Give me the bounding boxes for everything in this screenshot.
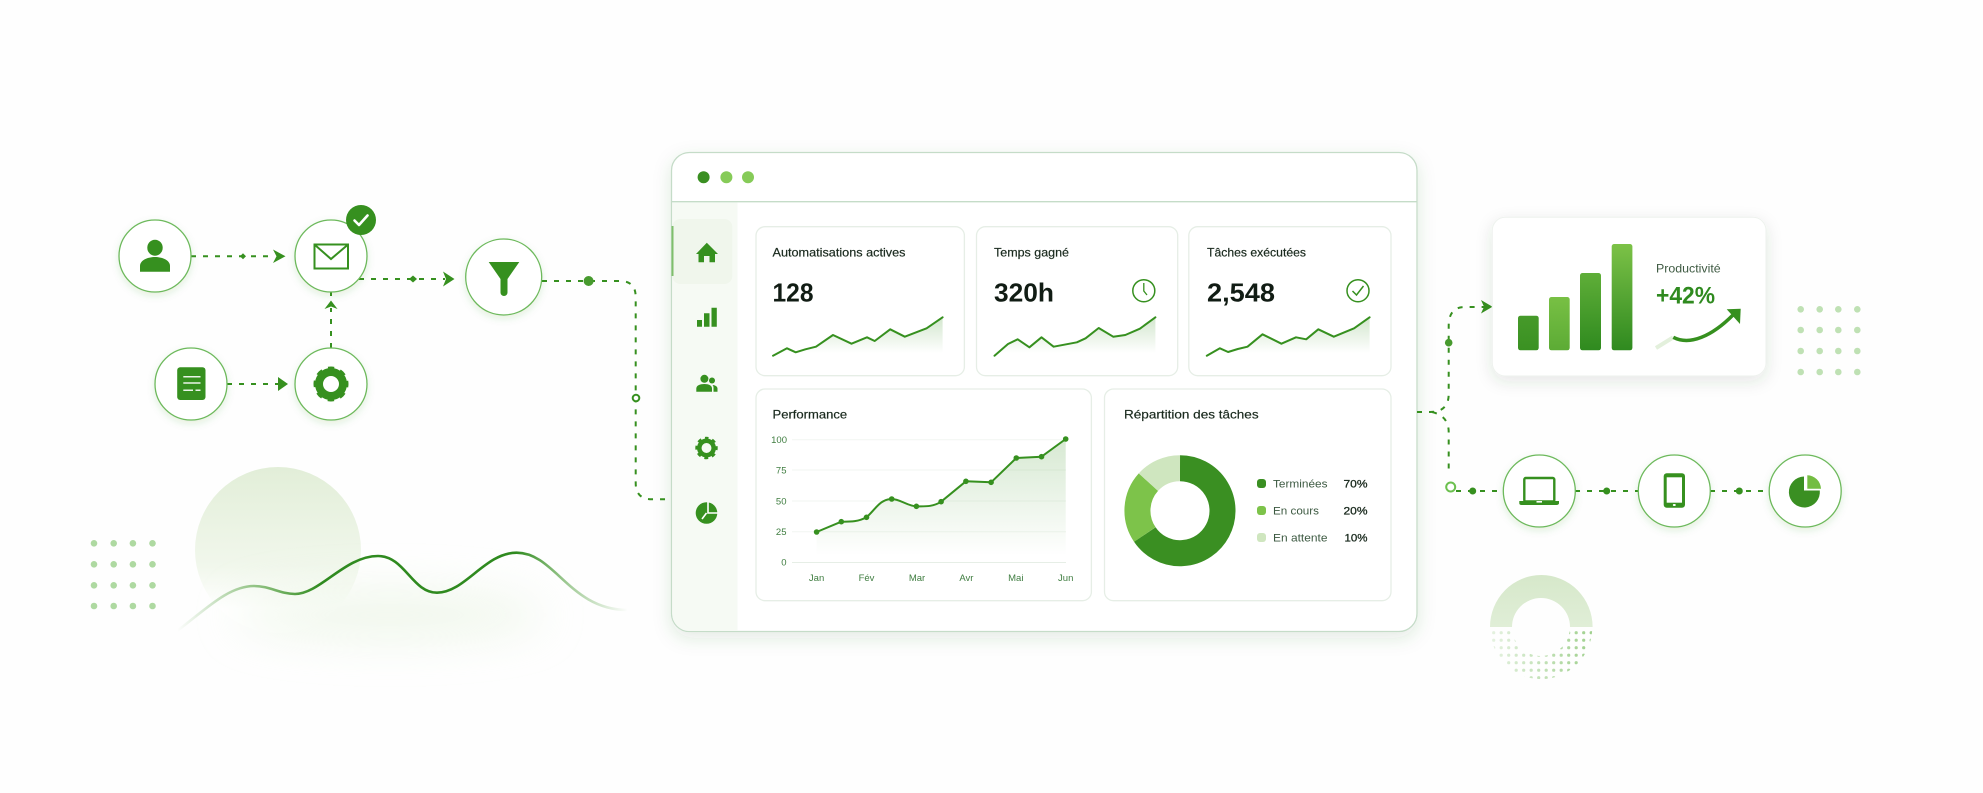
y axis labels: 100: [771, 435, 787, 446]
node: person: [119, 220, 191, 292]
window controls: [698, 171, 754, 183]
card: répartition des tâches: [1104, 389, 1391, 601]
flow connector: dashboard to devices: [1432, 412, 1769, 494]
card: automatisations actives: 128: [772, 278, 814, 308]
decoration: right dot grid: [1797, 306, 1861, 375]
area and line: [817, 439, 1066, 562]
icon: home: [696, 243, 718, 262]
donut chart: [1137, 468, 1223, 553]
window header line: [672, 201, 1417, 203]
y axis labels: 25: [776, 527, 786, 538]
card: tâches exécutées: Tâches exécutées: [1207, 246, 1306, 260]
decoration: left dot grid: [91, 540, 156, 609]
x axis labels: Avr: [959, 573, 973, 584]
flow connector: mail to filter: [359, 272, 454, 286]
legend: 20%: [1344, 505, 1368, 517]
card: temps gagné: Temps gagné: [994, 246, 1069, 260]
icon: bar chart: [697, 308, 717, 327]
sidebar active highlight: [672, 219, 732, 284]
flow connector: gear to mail: [324, 292, 338, 348]
card: automatisations actives: [756, 227, 964, 376]
sidebar: [672, 202, 738, 631]
flow connector: filter to dashboard: [542, 276, 671, 499]
flow connector: document to gear: [227, 377, 288, 391]
legend: 10%: [1344, 532, 1368, 544]
node: gear: [295, 348, 367, 420]
dashboard window: [672, 152, 1417, 632]
card: productivité: Productivité: [1656, 262, 1721, 276]
x axis labels: Fév: [859, 573, 875, 584]
card: productivité: +42%: [1656, 282, 1715, 309]
legend: Terminées: [1273, 478, 1328, 490]
x axis labels: Jun: [1058, 573, 1073, 584]
node: document: [155, 348, 227, 420]
card: productivité: [1492, 217, 1766, 376]
legend: 70%: [1344, 478, 1368, 490]
node: pie chart: [1769, 455, 1841, 527]
card: tâches exécutées: 2,548: [1207, 278, 1275, 308]
decoration: halftone ring: [1490, 575, 1592, 679]
x axis labels: Mar: [909, 573, 925, 584]
node: mail: [295, 220, 367, 292]
y axis labels: 50: [776, 496, 786, 508]
card: temps gagné: [976, 227, 1178, 376]
card: répartition des tâches: Répartition des tâches: [1124, 408, 1259, 422]
node: laptop: [1503, 455, 1575, 527]
growth arrow: [1656, 309, 1741, 348]
flow connector: person to mail: [191, 250, 286, 263]
icon: users: [696, 375, 718, 392]
legend: En cours: [1273, 505, 1320, 517]
legend: En attente: [1273, 532, 1328, 544]
y axis labels: 0: [781, 558, 786, 568]
card: performance chart: [756, 389, 1091, 601]
x axis labels: Jan: [809, 573, 824, 584]
badge: mail check: [346, 205, 376, 235]
icon: check circle: [1347, 280, 1369, 302]
y axis labels: 75: [776, 466, 786, 476]
card: automatisations actives: Automatisations actives: [772, 246, 906, 260]
icon: settings: [697, 438, 716, 458]
x axis labels: [809, 573, 1073, 584]
icon: reports pie: [696, 502, 718, 524]
icon: clock: [1133, 280, 1155, 302]
card: tâches exécutées: [1189, 227, 1391, 376]
y axis labels: [771, 435, 787, 568]
flow connector: dashboard to productivity card: [1417, 300, 1492, 412]
node: filter: [466, 239, 542, 315]
bar chart: [1518, 244, 1632, 350]
card: temps gagné: 320h: [994, 278, 1054, 308]
legend: [1257, 478, 1368, 544]
decoration: pale sun and wave: [177, 467, 628, 639]
node: phone: [1638, 455, 1710, 527]
x axis labels: Mai: [1008, 573, 1023, 584]
card: performance chart: Performance: [772, 408, 847, 422]
